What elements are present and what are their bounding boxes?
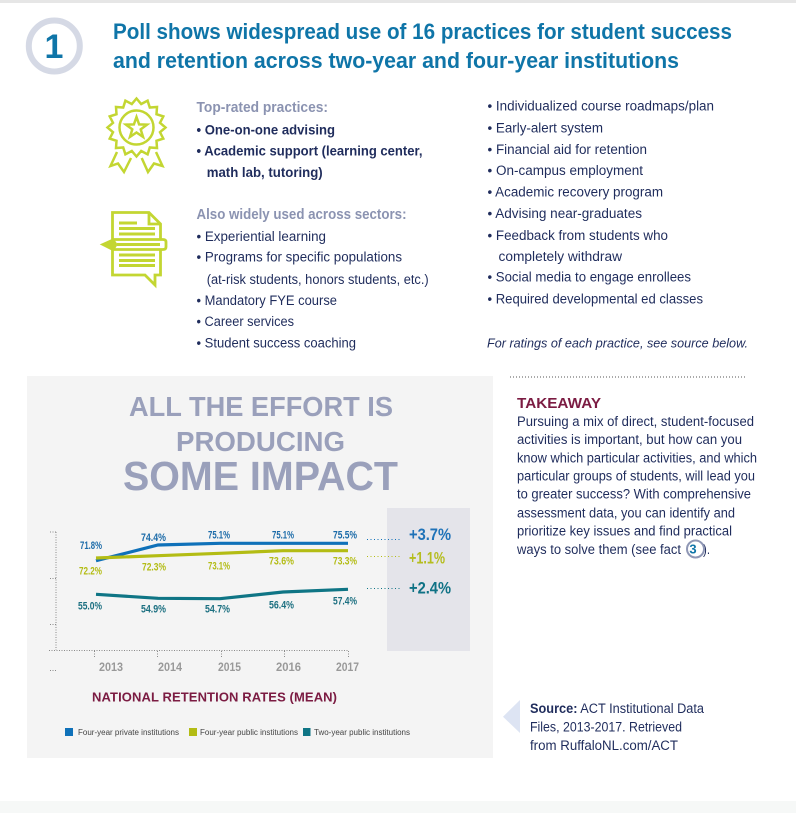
line: four-year public — [96, 551, 348, 558]
text block: top-rated practices: • Academic support (learning center, — [196, 144, 422, 159]
data labels: two-year public: 57.4% — [333, 596, 357, 608]
change values with leaders: +1.1% — [409, 549, 445, 568]
chart title: NATIONAL RETENTION RATES (MEAN) — [92, 690, 337, 704]
icon: award ribbon — [108, 98, 166, 172]
text block: top-rated practices: • One-on-one advising — [196, 122, 335, 137]
takeaway: know which particular activities, and which — [517, 451, 757, 466]
source: from RuffaloNL.com/ACT — [530, 738, 678, 753]
legend: Four-year private institutions — [78, 728, 179, 737]
chart axes — [49, 532, 349, 670]
number badge 1 — [29, 20, 80, 72]
panel heading — [123, 391, 398, 499]
data labels: four-year private: 75.5% — [333, 530, 357, 542]
text block: also widely used: (at-risk students, honors students, etc.) — [207, 272, 429, 287]
text block: also widely used: • Mandatory FYE course — [196, 293, 337, 308]
text block: right practice list: • Required developmental ed classes — [488, 292, 703, 307]
takeaway — [516, 395, 757, 558]
title: Poll shows widespread use of 16 practices for student success — [113, 19, 732, 44]
text block: right practice list — [488, 99, 714, 307]
takeaway: assessment data, you can identify and — [517, 506, 735, 521]
number badge 1: 1 — [45, 28, 63, 66]
fact 3 badge — [687, 540, 704, 558]
panel: retention chart — [27, 376, 493, 758]
data labels: four-year public: 72.2% — [79, 566, 102, 578]
takeaway: to greater success? With comprehensive — [517, 487, 751, 502]
fact 3 badge: 3 — [689, 542, 697, 556]
data labels: four-year private: 71.8% — [80, 540, 102, 552]
takeaway: activities is important, but how can you — [517, 432, 742, 447]
x-axis years: 2015 — [218, 660, 241, 674]
source: Files, 2013-2017. Retrieved — [530, 720, 682, 735]
takeaway: TAKEAWAY — [517, 395, 601, 412]
line: two-year public — [96, 589, 348, 599]
icon: document with pencil — [103, 212, 166, 285]
data labels: four-year private: 75.1% — [272, 530, 294, 542]
text block: right practice list: • Financial aid for retention — [488, 142, 647, 157]
x-axis years: 2013 — [99, 660, 123, 674]
title: and retention across two-year and four-year institutions — [113, 48, 679, 73]
x-axis years: 2016 — [276, 660, 301, 674]
data labels: four-year public: 73.3% — [333, 555, 357, 567]
change values with leaders — [367, 525, 451, 597]
legend: Four-year public institutions — [200, 728, 298, 737]
legend: Two-year public institutions — [314, 728, 410, 737]
takeaway: prioritize key issues and find practical — [517, 524, 732, 539]
data labels: four-year public: 72.3% — [142, 562, 166, 574]
text block: right practice list: • Social media to engage enrollees — [488, 270, 691, 285]
arrow: source marker — [503, 700, 520, 733]
source: Source: ACT Institutional Data — [530, 701, 704, 716]
text block: right practice list: • Advising near-graduates — [488, 206, 642, 221]
change values with leaders: +2.4% — [409, 578, 451, 597]
panel heading: SOME IMPACT — [123, 453, 398, 499]
change values with leaders: +3.7% — [409, 525, 451, 544]
text block: right practice list: • Academic recovery program — [488, 185, 663, 200]
text block: also widely used: • Student success coaching — [196, 336, 356, 351]
data labels: four-year private — [80, 530, 357, 552]
data labels: two-year public: 54.7% — [205, 604, 230, 616]
text block: top-rated practices — [196, 100, 422, 180]
text block: right practice list: • Early-alert system — [488, 121, 603, 136]
x-axis years: 2017 — [336, 660, 359, 674]
text block: top-rated practices: Top-rated practices: — [196, 100, 328, 116]
panel heading: PRODUCING — [176, 426, 345, 457]
data labels: two-year public: 56.4% — [269, 600, 294, 612]
note: ratings: For ratings of each practice, see source below. — [487, 336, 748, 351]
text block: right practice list: • Individualized course roadmaps/plan — [488, 99, 714, 114]
text block: also widely used — [196, 207, 429, 351]
data labels: four-year public — [79, 555, 357, 578]
data labels: four-year private: 74.4% — [141, 532, 166, 544]
takeaway: ways to solve them (see fact — [516, 542, 681, 557]
change highlight box — [387, 508, 470, 651]
data labels: four-year private: 75.1% — [208, 530, 230, 542]
data labels: two-year public: 55.0% — [78, 600, 102, 612]
text block: also widely used: • Programs for specific populations — [196, 250, 402, 265]
title — [113, 19, 732, 73]
text block: right practice list: • Feedback from students who — [488, 228, 668, 243]
legend — [65, 728, 410, 737]
text block: also widely used: Also widely used across sectors: — [196, 207, 406, 223]
takeaway: particular groups of students, will lead you — [517, 469, 755, 484]
text block: also widely used: • Career services — [196, 314, 294, 329]
data labels: four-year public: 73.6% — [269, 555, 294, 567]
text block: right practice list: completely withdraw — [498, 249, 622, 264]
data labels: two-year public: 54.9% — [141, 604, 166, 616]
text block: also widely used: • Experiential learning — [196, 229, 326, 244]
line: four-year private — [96, 543, 348, 561]
x-axis years — [99, 660, 359, 674]
data labels: two-year public — [78, 596, 357, 616]
x-axis years: 2014 — [158, 660, 182, 674]
panel heading: ALL THE EFFORT IS — [129, 391, 393, 422]
source — [530, 701, 704, 753]
text block: top-rated practices: math lab, tutoring) — [207, 165, 323, 180]
data labels: four-year public: 73.1% — [208, 561, 230, 573]
takeaway: Pursuing a mix of direct, student-focused — [517, 414, 754, 429]
takeaway: ). — [703, 542, 710, 557]
text block: right practice list: • On-campus employment — [488, 163, 643, 178]
